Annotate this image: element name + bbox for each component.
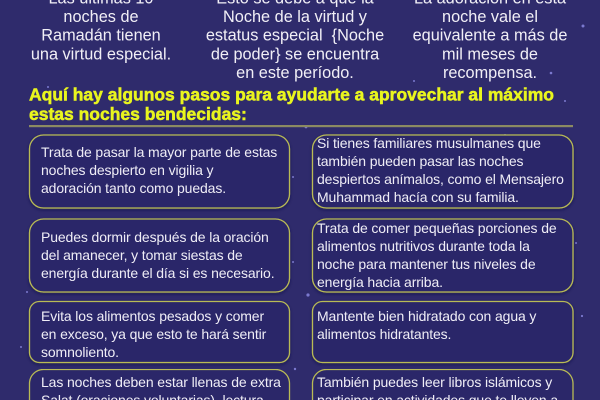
heading: Aquí hay algunos pasos para ayudarte a aprovechar al máximo xyxy=(29,84,554,104)
column text: worship reward: mil meses de xyxy=(442,46,538,64)
column text: last ten nights xyxy=(31,0,171,64)
card: sleep xyxy=(30,219,290,292)
column text: last ten nights: una virtud especial. xyxy=(31,46,171,64)
card: vigil: Trata de pasar la mayor parte de estas xyxy=(41,144,277,160)
card: vigil xyxy=(30,135,290,208)
heading xyxy=(29,84,554,124)
column text: night of power: Noche de la virtud y xyxy=(223,8,368,26)
card: family: Si tienes familiares musulmanes que xyxy=(317,135,541,151)
column text: night of power: de poder} se encuentra xyxy=(211,46,380,64)
card: small meals: noche para mantener tus niveles de xyxy=(317,256,536,272)
column text: worship reward xyxy=(413,0,567,82)
heading: estas noches bendecidas: xyxy=(29,104,247,124)
column text: worship reward: noche vale el xyxy=(442,8,538,26)
column text: night of power xyxy=(206,0,384,82)
card: sleep: Puedes dormir después de la oración xyxy=(41,229,269,245)
card: hydration: Mantente bien hidratado con agua y xyxy=(317,308,536,324)
card: vigil: noches despierto en vigilia y xyxy=(41,162,214,178)
card: heavy food: Evita los alimentos pesados y comer xyxy=(41,308,264,324)
card: hydration xyxy=(312,302,573,362)
card: heavy food xyxy=(30,302,290,362)
card: islamic books xyxy=(312,369,574,400)
card: small meals: Trata de comer pequeñas porciones de xyxy=(317,220,557,236)
card: sleep: energía durante el día si es necesario. xyxy=(41,265,274,281)
card: extra prayers: Las noches deben estar llenas de extra xyxy=(41,374,281,390)
column text: last ten nights: noches de xyxy=(63,8,139,26)
card: small meals: alimentos nutritivos durante toda la xyxy=(317,238,530,254)
card: hydration: alimentos hidratantes. xyxy=(317,326,451,342)
card: family xyxy=(312,135,573,208)
column text: worship reward: recompensa. xyxy=(443,64,537,82)
card: sleep: del amanecer, y tomar siestas de xyxy=(41,247,243,263)
card: heavy food: en exceso, ya que esto te hará sentir xyxy=(41,326,267,342)
card: islamic books: También puedes leer libros islámicos y xyxy=(317,374,552,390)
card: vigil: adoración tanto como puedas. xyxy=(41,180,226,196)
column text: night of power: en este período. xyxy=(236,64,354,82)
card: extra prayers xyxy=(28,369,290,400)
column text: worship reward: equivalente a más de xyxy=(413,26,567,44)
card: heavy food: somnoliento. xyxy=(41,344,119,360)
card: family: despiertos anímalos, como el Mensajero xyxy=(317,171,564,187)
card: small meals: energía hacia arriba. xyxy=(317,274,443,290)
card: family: también pueden pasar las noches xyxy=(317,153,524,169)
column text: night of power: estatus especial {Noche xyxy=(206,26,384,44)
card: family: Muhammad hacía con su familia. xyxy=(317,189,519,205)
column text: last ten nights: Ramadán tienen xyxy=(41,26,161,44)
card: small meals xyxy=(312,219,573,292)
